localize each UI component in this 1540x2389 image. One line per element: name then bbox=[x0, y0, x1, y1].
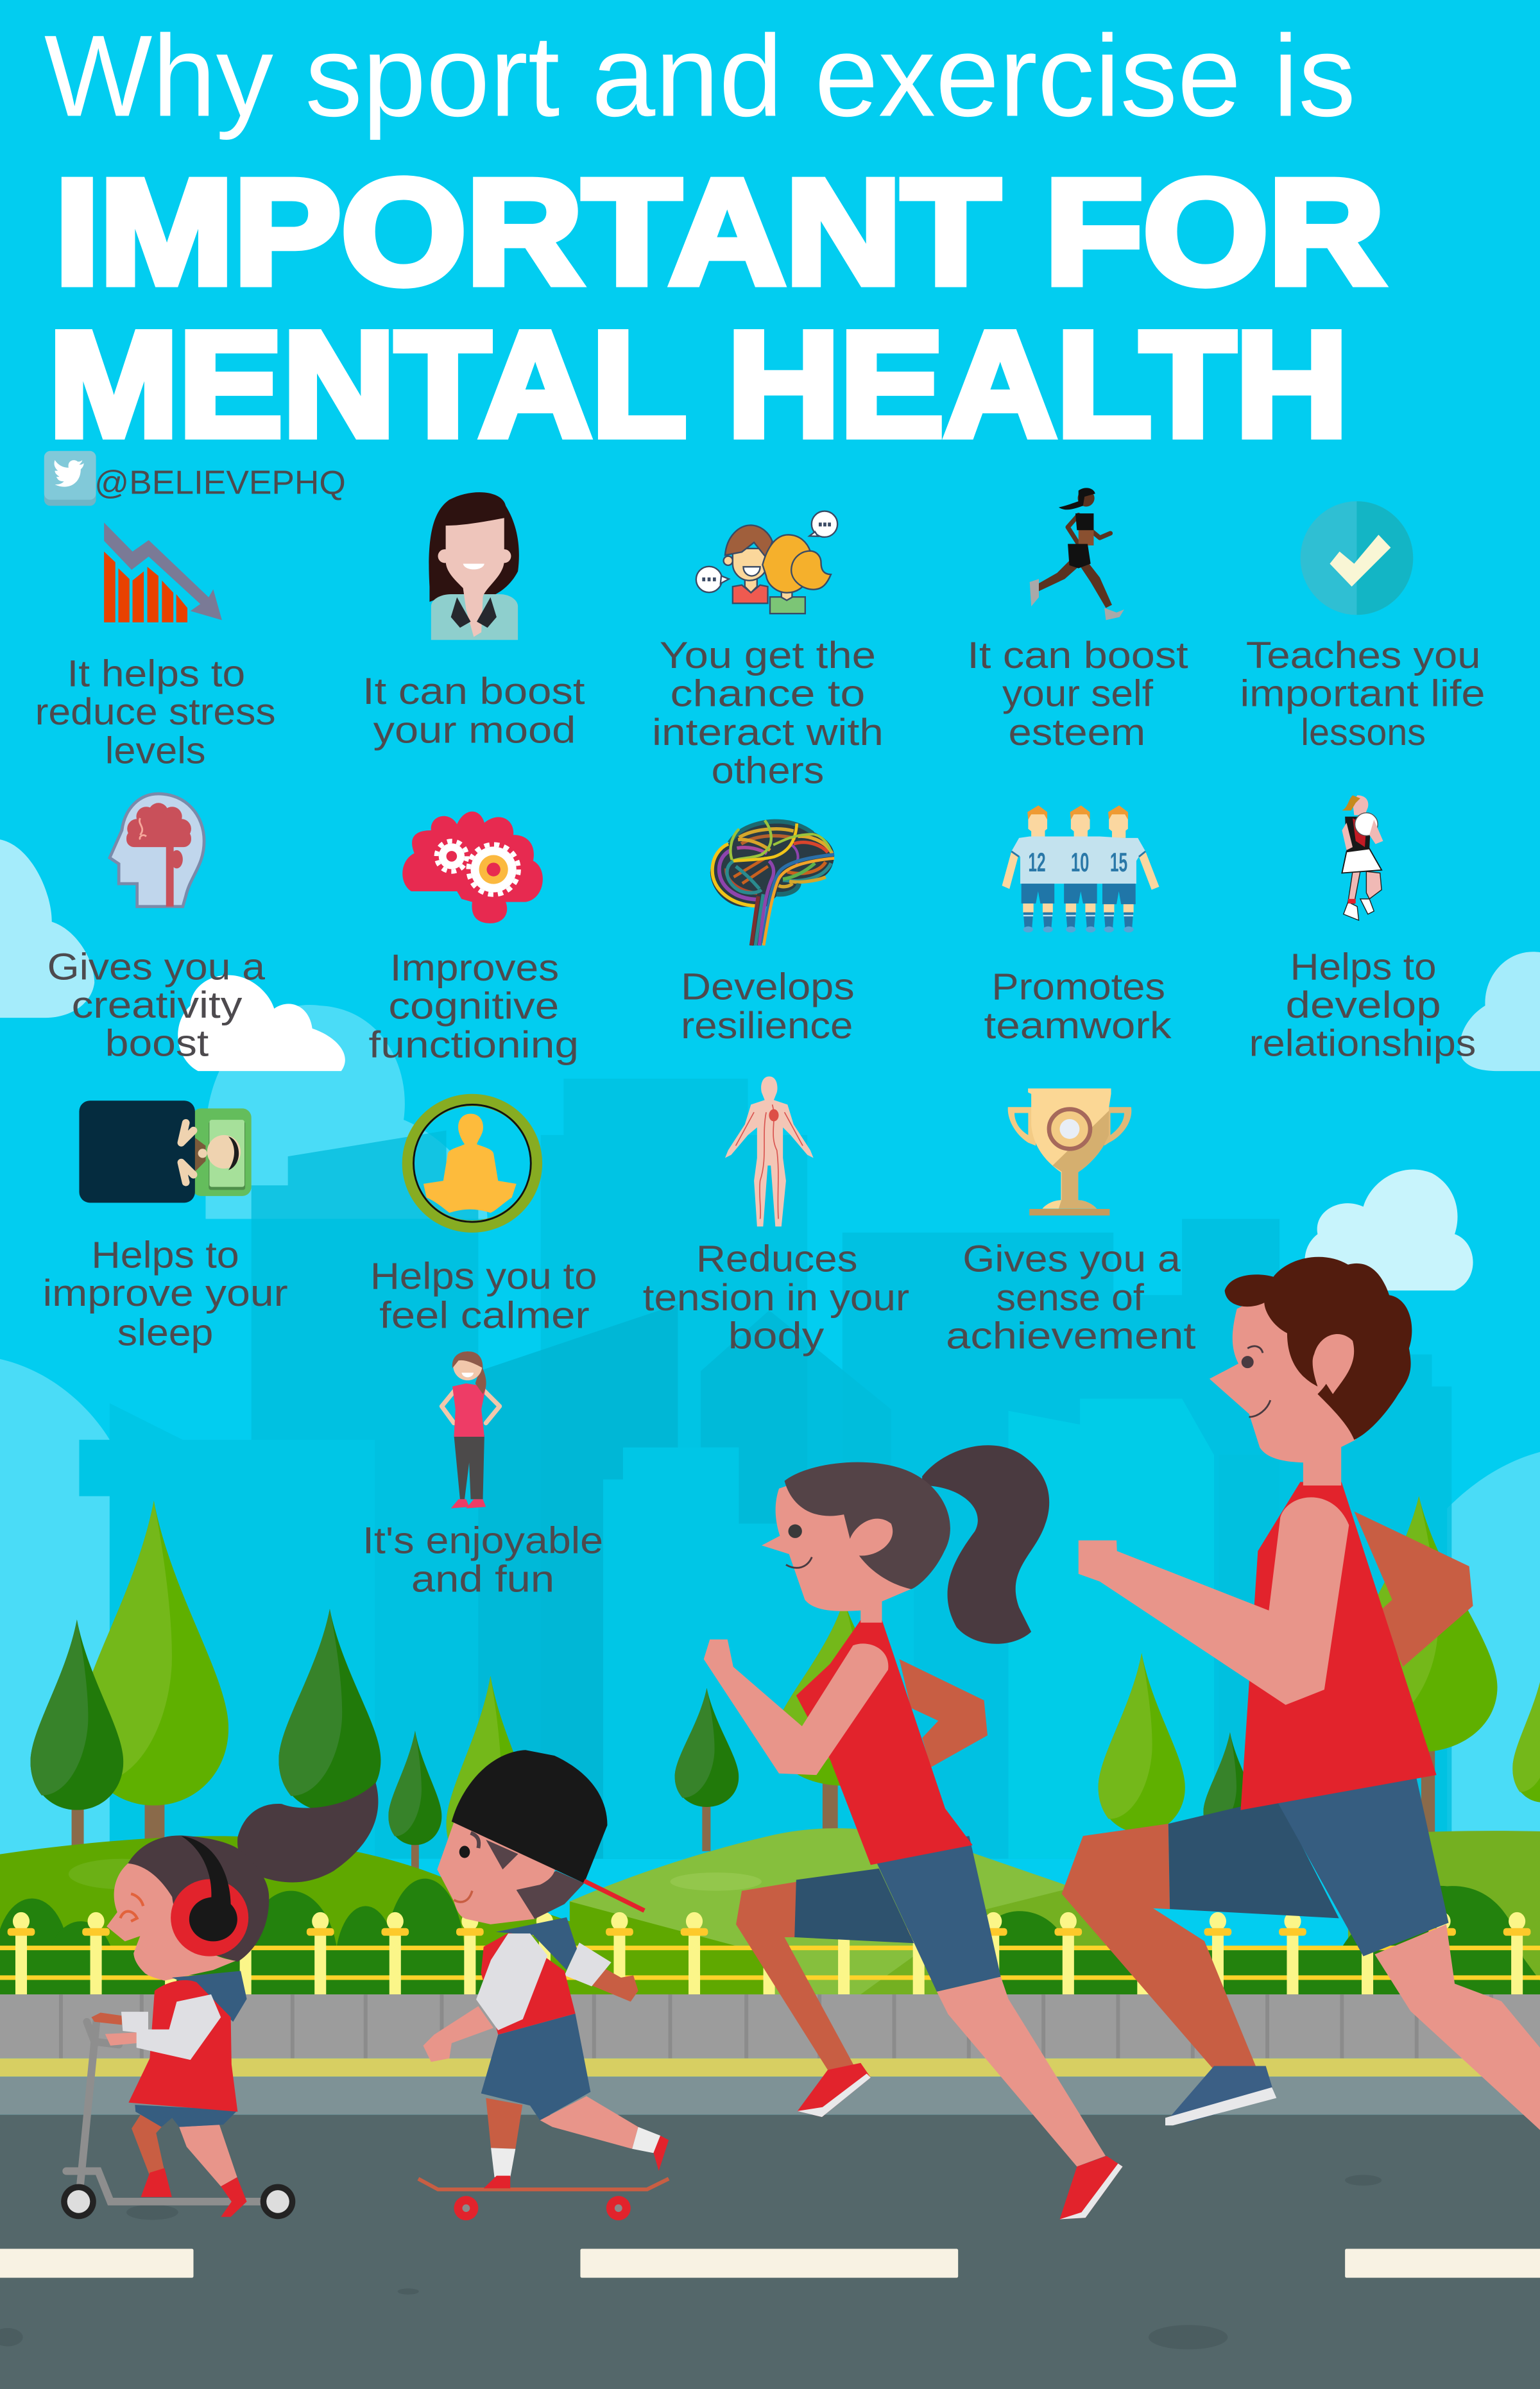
vest bbox=[481, 1932, 576, 2035]
character: girl on scooter bbox=[61, 1783, 378, 2219]
caption: creativity boost: Gives you a bbox=[47, 946, 266, 988]
caption: self esteem bbox=[967, 635, 1188, 753]
back leg bbox=[1062, 1824, 1257, 2070]
caption: improve sleep: improve your bbox=[42, 1272, 288, 1314]
caption: reduces tension: Reduces bbox=[696, 1238, 857, 1280]
ponytail bbox=[237, 1783, 378, 1882]
caption: improve sleep: Helps to bbox=[91, 1234, 239, 1276]
road bbox=[0, 2115, 1540, 2389]
shorts bbox=[481, 2014, 590, 2120]
caption: boost mood: your mood bbox=[373, 709, 576, 751]
skateboard bbox=[418, 2179, 669, 2220]
caption: cognitive functioning: Improves bbox=[390, 947, 559, 989]
icon: smiling woman bbox=[429, 492, 519, 640]
legs bbox=[132, 2112, 164, 2176]
arms bbox=[1002, 852, 1159, 890]
caption: interact with others: You get the bbox=[660, 635, 876, 676]
caption: creativity boost: creativity bbox=[72, 984, 242, 1026]
character: woman runner bbox=[704, 1445, 1123, 2219]
caption: creativity boost: boost bbox=[105, 1022, 209, 1064]
legs bbox=[486, 2098, 522, 2149]
head bbox=[860, 1592, 882, 1623]
jerseys bbox=[1011, 837, 1145, 884]
caption: teamwork bbox=[984, 966, 1172, 1047]
caption: relationships bbox=[1249, 946, 1476, 1064]
caption: relationships: develop bbox=[1286, 984, 1441, 1026]
scooter bbox=[61, 2019, 295, 2219]
caption: life lessons: lessons bbox=[1301, 712, 1426, 753]
caption: reduce stress: It helps to bbox=[67, 653, 245, 695]
icon: happy standing woman bbox=[441, 1351, 500, 1509]
shorts bbox=[135, 2105, 237, 2127]
caption: resilience bbox=[681, 966, 855, 1047]
back arm bbox=[1354, 1511, 1473, 1667]
icon: football team: 15 bbox=[1110, 847, 1127, 877]
fence bbox=[0, 1912, 1540, 1994]
icon: two people chatting bbox=[696, 511, 837, 613]
caption: interact with others: chance to bbox=[671, 673, 865, 715]
caption: creativity boost bbox=[47, 946, 266, 1064]
ponytail bbox=[922, 1445, 1049, 1644]
caption: improve sleep: sleep bbox=[117, 1312, 213, 1354]
icon: football team bbox=[1002, 805, 1159, 932]
icon: colourful brain bbox=[710, 819, 834, 945]
caption: life lessons bbox=[1240, 635, 1485, 753]
caption: reduce stress bbox=[35, 653, 276, 772]
caption: interact with others bbox=[652, 635, 884, 791]
caption: achievement: achievement bbox=[946, 1315, 1196, 1357]
caption: reduces tension bbox=[643, 1238, 909, 1357]
tank bbox=[1241, 1482, 1437, 1810]
caption: achievement: Gives you a bbox=[963, 1238, 1181, 1280]
caption: boost mood: It can boost bbox=[363, 671, 585, 712]
caption: self esteem: your self bbox=[1002, 673, 1154, 715]
head bbox=[437, 1813, 535, 1924]
caption: improve sleep bbox=[42, 1234, 288, 1354]
title: IMPORTANT FOR bbox=[55, 149, 1385, 316]
icon: football team: 12 bbox=[1028, 847, 1046, 877]
caption: achievement bbox=[946, 1238, 1196, 1357]
caption: enjoyable and fun: and fun bbox=[411, 1558, 554, 1600]
caption: teamwork: Promotes bbox=[991, 966, 1165, 1008]
hair bbox=[1225, 1257, 1412, 1440]
caption: resilience: Develops bbox=[681, 966, 855, 1008]
hood bbox=[172, 1971, 247, 2022]
caption: self esteem: It can boost bbox=[967, 635, 1188, 676]
caption: reduce stress: levels bbox=[105, 730, 205, 772]
tank bbox=[796, 1620, 973, 1865]
background clouds bbox=[0, 839, 1540, 1889]
caption: teamwork: teamwork bbox=[984, 1005, 1172, 1047]
caption: achievement: sense of bbox=[997, 1277, 1145, 1319]
icon: human body bbox=[725, 1076, 814, 1226]
dress bbox=[128, 1980, 237, 2112]
caption: enjoyable and fun bbox=[363, 1520, 603, 1600]
icon: trophy bbox=[1008, 1088, 1131, 1215]
helmet bbox=[452, 1750, 607, 1883]
city skyline bbox=[79, 1079, 1451, 1859]
shorts bbox=[1168, 1798, 1339, 1918]
caption: interact with others: interact with bbox=[652, 712, 884, 753]
front arm bbox=[704, 1640, 888, 1775]
caption: reduce stress: reduce stress bbox=[35, 691, 276, 733]
icon: head with brain bbox=[110, 794, 204, 907]
sidewalk bbox=[0, 1994, 1540, 2115]
icon: check mark bbox=[1301, 501, 1413, 615]
caption: reduces tension: tension in your bbox=[643, 1277, 909, 1319]
shorts bbox=[794, 1869, 914, 1943]
twitter handle bbox=[44, 451, 346, 506]
head bbox=[128, 1835, 269, 1962]
bushes bbox=[0, 1879, 1540, 2040]
caption: cognitive functioning: cognitive bbox=[388, 985, 559, 1027]
caption: cognitive functioning: functioning bbox=[368, 1024, 579, 1066]
player 12 bbox=[1023, 805, 1053, 932]
character: boy on skateboard bbox=[418, 1750, 669, 2220]
caption: resilience: resilience bbox=[681, 1005, 853, 1047]
caption: interact with others: others bbox=[712, 749, 824, 791]
icon: netball player bbox=[1342, 795, 1383, 920]
back leg bbox=[736, 1881, 857, 2070]
hills bbox=[0, 1828, 1540, 1996]
icon: falling stress chart bbox=[104, 522, 222, 622]
caption: relationships: relationships bbox=[1249, 1022, 1476, 1064]
caption: life lessons: important life bbox=[1240, 673, 1485, 715]
back arm bbox=[900, 1659, 988, 1767]
shorts bbox=[1022, 884, 1136, 904]
caption: cognitive functioning bbox=[368, 947, 579, 1066]
headphones bbox=[171, 1880, 248, 1957]
icon: football team: 10 bbox=[1071, 847, 1089, 877]
caption: self esteem: esteem bbox=[1009, 712, 1145, 753]
caption: relationships: Helps to bbox=[1290, 946, 1437, 988]
title: MENTAL HEALTH bbox=[49, 301, 1348, 468]
caption: boost mood bbox=[363, 671, 585, 751]
title bbox=[44, 12, 1385, 468]
icon: female runner bbox=[1030, 488, 1124, 620]
caption: reduces tension: body bbox=[728, 1315, 824, 1357]
caption: enjoyable and fun: It's enjoyable bbox=[363, 1520, 603, 1562]
trees bbox=[30, 1496, 1540, 1874]
icon: meditation bbox=[408, 1100, 536, 1226]
caption: life lessons: Teaches you bbox=[1246, 635, 1480, 676]
front arm bbox=[1079, 1497, 1349, 1705]
title: Why sport and exercise is bbox=[44, 12, 1356, 141]
caption: feel calmer bbox=[370, 1256, 597, 1336]
head bbox=[1303, 1440, 1341, 1486]
player 15 bbox=[1104, 805, 1134, 932]
character: man runner bbox=[1062, 1257, 1540, 2130]
caption: feel calmer: feel calmer bbox=[379, 1294, 590, 1336]
back arm bbox=[591, 1967, 638, 2001]
caption: feel calmer: Helps you to bbox=[370, 1256, 597, 1297]
player 10 bbox=[1066, 805, 1095, 932]
icon: person sleeping bbox=[79, 1100, 252, 1203]
icon: twitter tile bbox=[44, 451, 96, 506]
arms bbox=[91, 2013, 122, 2025]
front arm bbox=[423, 2006, 493, 2062]
twitter handle: @BELIEVEPHQ bbox=[94, 464, 346, 501]
icon: brain with gears bbox=[402, 812, 543, 923]
